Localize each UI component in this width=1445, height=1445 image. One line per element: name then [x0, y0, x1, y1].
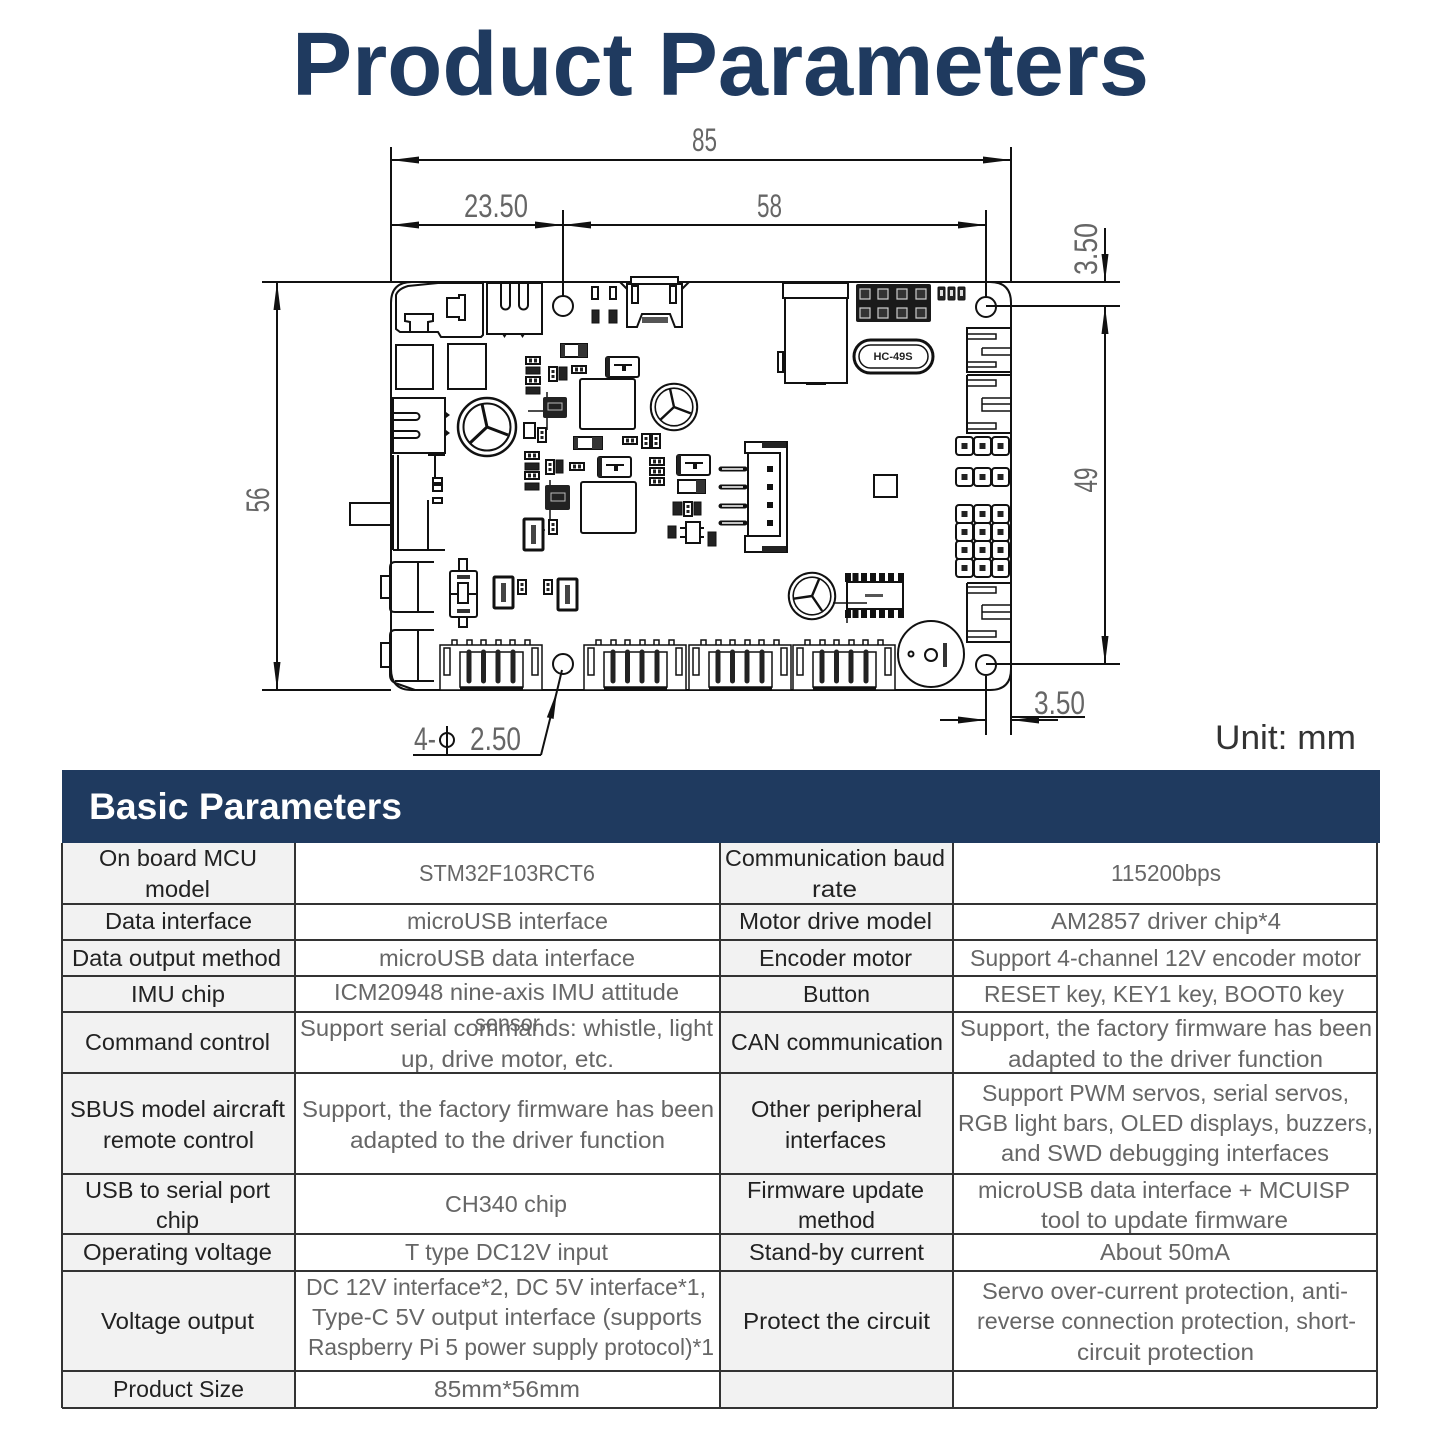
dimension labels: 58 — [757, 188, 782, 224]
row: operating voltage / stand-by current: Operating voltage — [83, 1239, 272, 1265]
tact switch — [450, 559, 477, 627]
dimension labels — [240, 122, 1104, 757]
row: voltage output / protect circuit: Voltage output — [101, 1308, 255, 1334]
row: data output / encoder motor: Data output method — [72, 945, 281, 971]
dimension labels: 3.50 — [1034, 685, 1085, 721]
slide switch — [350, 455, 445, 550]
row: voltage output / protect circuit: Type-C 5V output interface (supports — [312, 1304, 702, 1330]
top connector — [487, 283, 542, 338]
row: command control / CAN: CAN communication — [731, 1029, 943, 1055]
row: command control / CAN — [85, 1010, 1372, 1072]
row: SBUS / peripherals: SBUS model aircraft — [70, 1096, 286, 1122]
row: data output / encoder motor: microUSB data interface — [379, 945, 635, 971]
row: USB to serial / firmware update: chip — [156, 1207, 199, 1233]
row: IMU chip / button: RESET key, KEY1 key, BOOT0 key — [984, 981, 1344, 1007]
surface-mount parts — [524, 344, 716, 550]
dimension labels: 49 — [1068, 468, 1104, 492]
buzzer — [898, 621, 964, 687]
resistors beside USB — [592, 287, 617, 323]
panel: basic parameters table — [62, 770, 1380, 1408]
row: data interface / motor drive: Motor drive model — [739, 908, 932, 934]
row: USB to serial / firmware update: method — [798, 1207, 875, 1233]
row: on board MCU / baud rate: model — [145, 876, 210, 902]
row: operating voltage / stand-by current — [83, 1239, 1231, 1265]
row: voltage output / protect circuit: Protect the circuit — [743, 1308, 931, 1334]
table header bar: Basic Parameters — [89, 786, 402, 827]
dimension labels: 3.50 — [1068, 223, 1104, 275]
row: command control / CAN: Support, the factory firmware has been — [960, 1015, 1372, 1041]
row: on board MCU / baud rate: rate — [812, 876, 857, 902]
unit note: Unit: mm — [1215, 719, 1356, 757]
title: Product Parameters — [292, 15, 1149, 115]
row: SBUS / peripherals: Other peripheral — [751, 1096, 922, 1122]
row: data output / encoder motor — [72, 945, 1361, 971]
crystal HC-49S: HC-49S — [873, 351, 913, 363]
row: command control / CAN: Command control — [85, 1029, 270, 1055]
board outline — [391, 282, 1011, 690]
power connector — [393, 398, 450, 453]
row: voltage output / protect circuit: circuit protection — [1077, 1339, 1254, 1365]
row: USB to serial / firmware update: microUSB data interface + MCUISP — [978, 1177, 1350, 1203]
row: USB to serial / firmware update: tool to update firmware — [1041, 1207, 1288, 1233]
row: operating voltage / stand-by current: About 50mA — [1100, 1239, 1231, 1265]
right side connectors — [967, 328, 1011, 642]
dimension drawing — [240, 122, 1120, 757]
dark pin header — [856, 284, 965, 322]
inductors — [580, 379, 636, 533]
dimension labels: 2.50 — [470, 721, 521, 757]
row: operating voltage / stand-by current: T type DC12V input — [405, 1239, 609, 1265]
micro USB connector — [620, 277, 689, 327]
capacitors — [458, 384, 844, 628]
row: on board MCU / baud rate — [99, 845, 1221, 902]
row: data output / encoder motor: Encoder motor — [759, 945, 912, 971]
row: IMU chip / button: IMU chip — [131, 981, 225, 1007]
row: voltage output / protect circuit: Raspberry Pi 5 power supply protocol)*1 — [308, 1334, 714, 1360]
row: on board MCU / baud rate: On board MCU — [99, 845, 257, 871]
row: product size — [113, 1376, 580, 1402]
row: data interface / motor drive: microUSB interface — [407, 908, 608, 934]
dimension lines — [262, 147, 1120, 755]
row: voltage output / protect circuit — [101, 1274, 1356, 1365]
table header bar — [62, 770, 1380, 843]
row: command control / CAN: adapted to the driver function — [1008, 1046, 1323, 1072]
side jacks — [381, 562, 434, 690]
row: data interface / motor drive — [105, 908, 1281, 934]
row: IMU chip / button: Button — [803, 981, 870, 1007]
row: on board MCU / baud rate: 115200bps — [1111, 860, 1221, 886]
row: USB to serial / firmware update: CH340 chip — [445, 1191, 567, 1217]
pads — [396, 344, 486, 389]
row: SBUS / peripherals — [70, 1080, 1373, 1166]
row: USB to serial / firmware update: Firmware update — [747, 1177, 924, 1203]
row: voltage output / protect circuit: Servo over-current protection, anti- — [982, 1278, 1348, 1304]
mounting holes — [553, 296, 996, 675]
row: operating voltage / stand-by current: Stand-by current — [749, 1239, 925, 1265]
table grid — [62, 843, 1377, 1408]
label column shading — [62, 843, 953, 1408]
four-pin center connector — [721, 442, 787, 552]
small ICs at bottom — [494, 577, 577, 610]
row: SBUS / peripherals: Support, the factory firmware has been — [302, 1096, 714, 1122]
row: on board MCU / baud rate: STM32F103RCT6 — [419, 860, 595, 886]
dimension labels: 56 — [240, 488, 276, 512]
row: SBUS / peripherals: Support PWM servos, serial servos, — [982, 1080, 1349, 1106]
SOP IC — [833, 573, 903, 623]
dimension labels: 23.50 — [464, 188, 528, 224]
dimension labels: 4- — [414, 721, 436, 757]
right pin headers — [956, 437, 1009, 577]
row: command control / CAN: Support serial commands: whistle, light — [300, 1015, 714, 1041]
dimension labels: 85 — [692, 122, 717, 158]
row: SBUS / peripherals: RGB light bars, OLED displays, buzzers, — [958, 1110, 1373, 1136]
crystal HC-49S — [854, 340, 933, 373]
row: USB to serial / firmware update — [85, 1177, 1350, 1233]
row: SBUS / peripherals: remote control — [103, 1127, 254, 1153]
row: USB to serial / firmware update: USB to serial port — [85, 1177, 271, 1203]
row: product size: Product Size — [113, 1376, 244, 1402]
row: data interface / motor drive: AM2857 driver chip*4 — [1051, 908, 1281, 934]
row: IMU chip / button: ICM20948 nine-axis IMU attitude — [334, 979, 679, 1005]
row: SBUS / peripherals: and SWD debugging interfaces — [1001, 1140, 1329, 1166]
row: IMU chip / button — [131, 979, 1344, 1007]
row: SBUS / peripherals: adapted to the driver function — [350, 1127, 665, 1153]
row: data output / encoder motor: Support 4-channel 12V encoder motor — [970, 945, 1361, 971]
row: voltage output / protect circuit: DC 12V interface*2, DC 5V interface*1, — [306, 1274, 706, 1300]
row: command control / CAN: sensor — [475, 1010, 540, 1036]
row: command control / CAN: up, drive motor, etc. — [401, 1046, 614, 1072]
JST connectors — [440, 640, 895, 690]
row: on board MCU / baud rate: Communication baud — [725, 845, 945, 871]
row: data interface / motor drive: Data interface — [105, 908, 252, 934]
row: SBUS / peripherals: interfaces — [785, 1127, 886, 1153]
test pad — [874, 475, 897, 497]
row: product size: 85mm*56mm — [434, 1376, 580, 1402]
DC jack — [778, 283, 848, 385]
top-left switch block — [396, 283, 483, 337]
row: voltage output / protect circuit: reverse connection protection, short- — [977, 1308, 1356, 1334]
